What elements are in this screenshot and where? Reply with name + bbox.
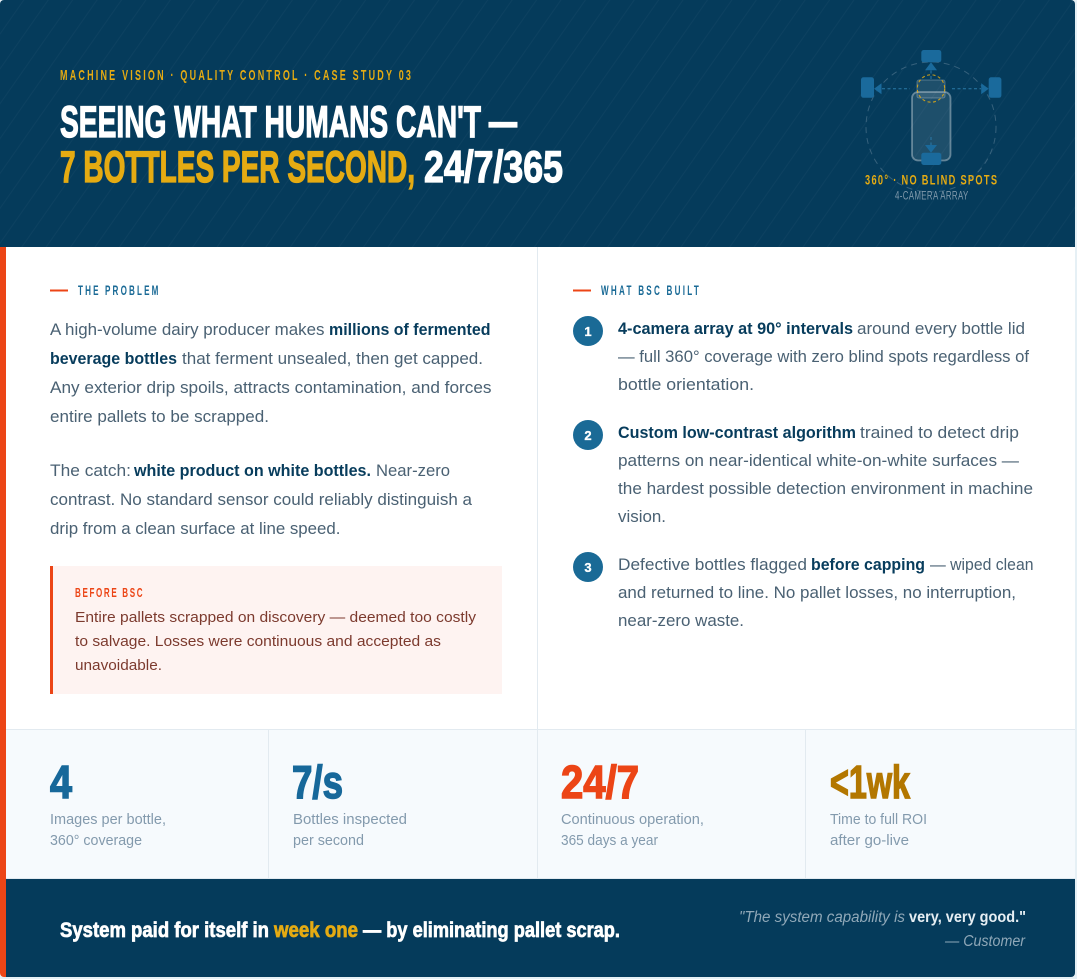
problem paragraph two: Near-zero [376,462,450,480]
step 3: Defective bottles flagged [618,556,807,574]
stat: bottles per second: Bottles inspected [293,812,407,828]
customer quote [740,910,1026,946]
step 2: 2 [584,428,592,443]
problem paragraph one: millions of fermented [329,321,490,339]
step 3: — wiped clean [930,556,1034,574]
section label: THE PROBLEM [78,284,158,299]
icon: 4-camera array diagram [861,50,1001,203]
problem paragraph two [50,462,473,538]
problem paragraph one: that ferment unsealed, then get capped. [182,350,483,368]
stat: continuous operation: 24/7 [561,756,639,808]
callout: before BSC: unavoidable. [75,657,162,674]
customer quote: "The system capability is [739,909,905,926]
title [60,98,563,192]
callout: before BSC [50,566,502,694]
step 1: — full 360° coverage with zero blind spots regardless of [618,348,1029,366]
step 1: 4-camera array at 90° intervals [618,320,853,338]
panel: what BSC built [573,284,1034,630]
callout: before BSC: BEFORE BSC [75,586,143,601]
step 2: patterns on near-identical white-on-white surfaces — [618,452,1020,470]
stat: time to ROI: Time to full ROI [830,812,927,828]
stat: continuous operation: 365 days a year [561,833,658,849]
footer band [6,879,1075,977]
callout: before BSC: to salvage. Losses were continuous and accepted as [75,633,441,650]
problem paragraph one: Any exterior drip spoils, attracts contamination, and forces [50,379,492,397]
title: 24/7/365 [424,143,563,192]
problem paragraph two: The catch: [50,462,131,480]
section label: WHAT BSC BUILT [601,284,699,299]
step 2: the hardest possible detection environment in machine [618,480,1033,498]
panel: the problem [50,284,502,694]
stat: images per bottle [50,765,165,848]
stat: images per bottle: 4 [50,756,72,808]
step 2 [573,420,1033,526]
step 3: before capping [811,556,925,574]
stat: images per bottle: 360° coverage [50,833,142,849]
header band [0,0,1075,247]
step 3: 3 [584,560,592,575]
title: 7 BOTTLES PER SECOND, [60,143,415,192]
footer headline: System paid for itself in [60,919,269,942]
section label [573,286,699,295]
stat: bottles per second [292,764,406,848]
section label [50,286,158,295]
problem paragraph one [50,321,492,426]
step 2: vision. [618,508,666,526]
stat: continuous operation: Continuous operation, [561,812,704,828]
step 1: 1 [584,324,592,339]
problem paragraph one: entire pallets to be scrapped. [50,408,269,426]
stat: time to ROI [830,764,926,848]
title: SEEING WHAT HUMANS CAN'T — [60,98,517,147]
problem paragraph two: drip from a clean surface at line speed. [50,520,340,538]
stat: time to ROI: <1wk [830,756,910,808]
problem paragraph two: contrast. No standard sensor could reliably distinguish a [50,491,473,509]
icon caption: 360° · NO BLIND SPOTS [865,172,997,188]
stat: continuous operation [562,764,703,848]
step 2: Custom low-contrast algorithm [618,424,856,442]
step 3 [573,552,1034,630]
step 1: around every bottle lid [857,320,1025,338]
customer quote: very, very good." [909,909,1026,926]
column divider [537,247,538,729]
footer headline [60,919,620,942]
problem paragraph one: beverage bottles [50,350,177,368]
step 3: near-zero waste. [618,612,744,630]
step 2: trained to detect drip [860,424,1019,442]
footer headline: week one [273,919,358,942]
step 1 [573,316,1029,394]
eyebrow: MACHINE VISION · QUALITY CONTROL · CASE STUDY 03 [60,67,411,84]
stats band [6,729,1075,879]
stat: images per bottle: Images per bottle, [50,812,166,828]
step 1: bottle orientation. [618,376,754,394]
icon sub-caption: 4-CAMERA ARRAY [895,190,968,203]
customer quote: — Customer [944,933,1026,950]
step 3: and returned to line. No pallet losses, no interruption, [618,584,1016,602]
callout: before BSC: Entire pallets scrapped on discovery — deemed too costly [75,609,477,626]
stat: bottles per second: 7/s [292,756,343,808]
stat: time to ROI: after go-live [830,833,909,849]
footer headline: — by eliminating pallet scrap. [363,919,620,942]
accent bar [0,247,6,977]
problem paragraph two: white product on white bottles. [133,462,371,480]
problem paragraph one: A high-volume dairy producer makes [50,321,324,339]
stat: bottles per second: per second [293,833,364,849]
